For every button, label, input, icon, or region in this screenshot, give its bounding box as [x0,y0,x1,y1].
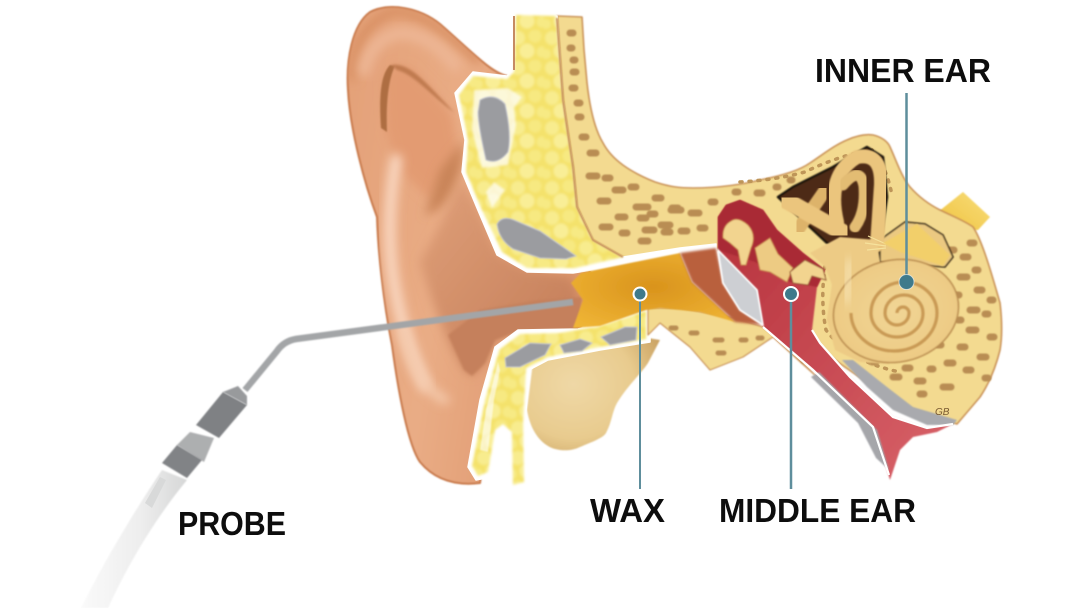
white fat gaps [472,88,522,208]
white band lower [468,306,650,487]
leader line [639,296,641,489]
skin edge line [513,16,515,70]
cochlea [824,248,968,374]
white skin band [455,15,716,273]
horizontal canal [787,201,842,232]
lower bone shape [648,308,817,377]
marker dot [784,287,798,301]
artist signature: GB [935,407,950,418]
white gaps lower [480,362,500,452]
probe handle [196,392,247,438]
temporal bone [557,16,1002,424]
helix shadow [380,65,395,132]
lower cartilage [497,218,576,259]
parotid gland lobe [527,330,660,450]
antihelix upper shade [425,140,464,215]
facial nerve bundle [938,192,990,232]
cochlea base body [827,270,890,364]
callout: wax [590,288,665,529]
probe rear collar [162,445,202,478]
label: WAX [590,492,665,529]
helix rim shade [352,12,480,80]
ossicle malleus [723,219,753,265]
middle ear cavity and throat [718,200,957,480]
white mucosa lines [763,327,953,475]
grey tube band right [842,360,957,425]
label: MIDDLE EAR [719,492,916,529]
vestibule [810,237,880,335]
conch lower edge [448,297,582,376]
grey strip lower [811,372,889,470]
canal wax [571,253,735,328]
auricle: outer ear [348,7,590,484]
label: INNER EAR [815,52,991,89]
lower cartilage 2 [560,339,592,353]
red cavity [718,200,953,480]
cochlear nerve cavity [880,222,953,267]
lower cartilage 1 [505,343,551,367]
lower cartilage 3 [601,327,637,345]
conch [420,180,579,376]
helix shadow upper [391,65,455,113]
ossicle incus [755,238,793,282]
nerve fibers [865,236,886,250]
cochlea spiral [851,282,937,351]
canal rear wall [680,248,763,325]
ear shading group [352,12,582,400]
callout: middle ear [719,287,916,529]
vestibule highlight [846,262,850,300]
eardrum [718,250,763,325]
marker dot [899,274,914,290]
upper cartilage [478,97,509,161]
rim highlight [364,33,455,70]
bone marrow cavities [570,33,994,394]
lobe highlight [402,330,445,400]
ossicle stapes [790,260,826,285]
lower canal bone [648,308,817,377]
leader line [905,93,908,280]
nerve bright part [883,224,950,266]
fat [459,15,623,268]
probe [81,386,247,608]
marker dot [634,288,646,300]
leader line [790,296,792,489]
scapha shade [388,71,458,194]
lower soft tissue [468,306,650,487]
bone mass [557,16,1002,424]
ear shell [348,7,590,484]
probe neck [223,386,247,405]
lower fat [472,311,646,485]
bone small pores ring [740,150,900,372]
callout: inner ear [815,52,991,290]
probe connector [177,432,214,462]
soft tissue: upper fat layer [455,15,716,273]
lower bone cavities [671,328,805,361]
rear canal [799,192,824,228]
inner canal loop [843,175,864,227]
probe inner wire [145,477,166,508]
anterior canal [834,156,881,245]
inner ear [778,147,968,374]
deep red upper cavity [718,200,825,287]
antihelix highlight [390,160,425,385]
bone and fat seam [557,18,623,257]
labyrinth cavity [778,147,887,260]
label: probe: PROBE [178,505,286,542]
probe tube [81,470,187,608]
probe shaft [245,302,573,390]
